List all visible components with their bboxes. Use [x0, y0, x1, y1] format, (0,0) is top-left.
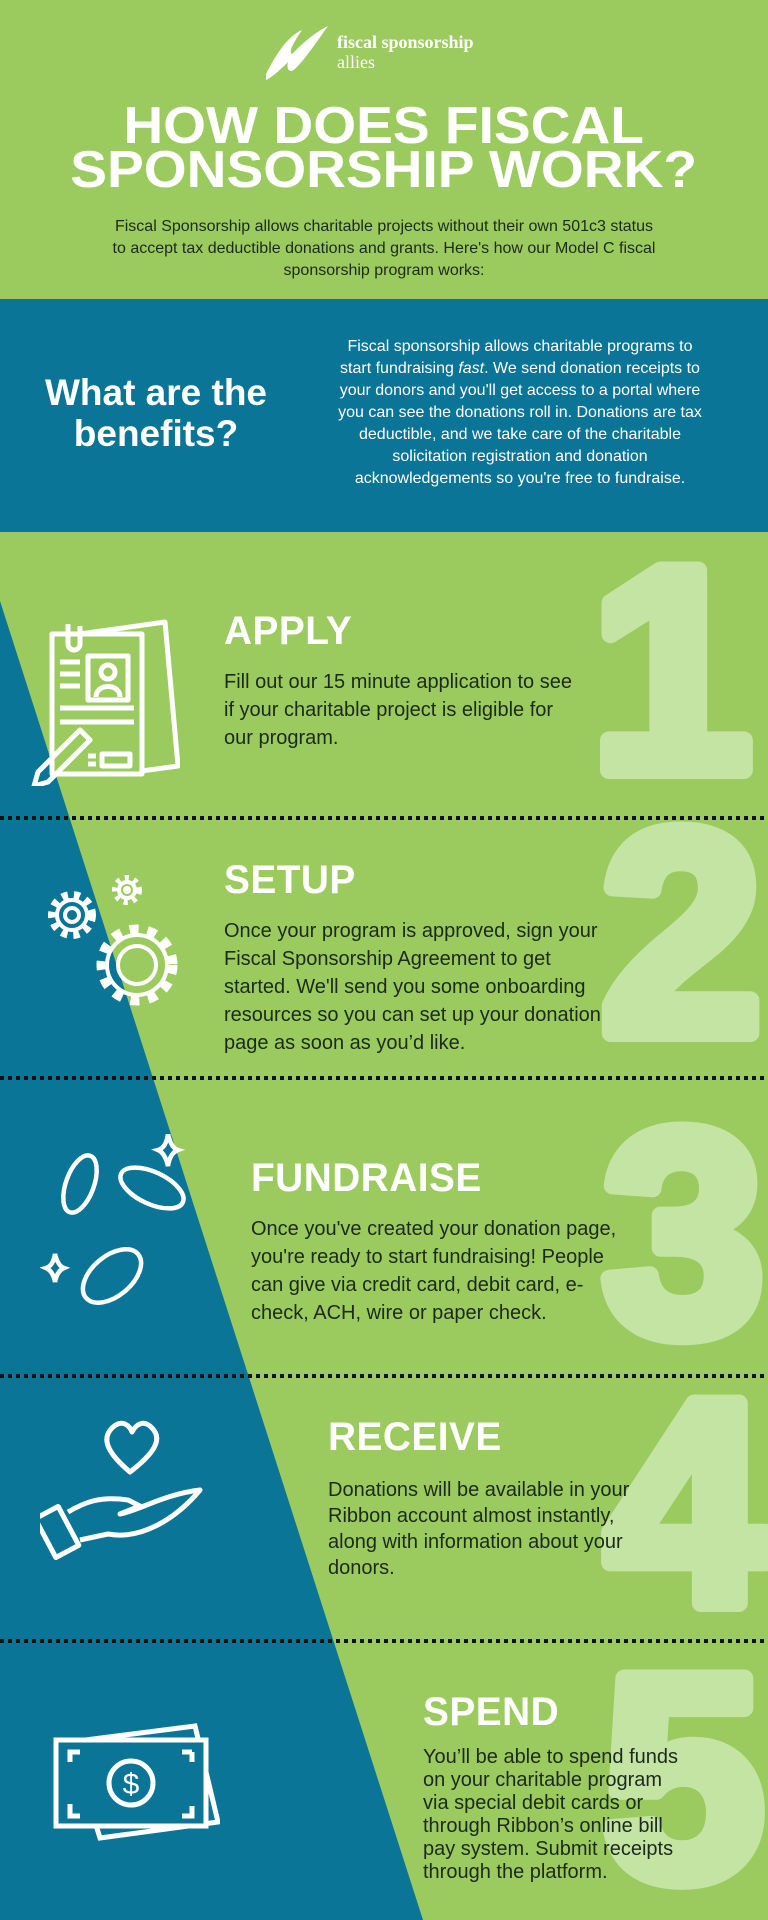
benefits text: deductible, and we take care of the charitable: [359, 426, 681, 443]
icon: application form: [32, 620, 180, 786]
text: fundraise: Once you've created your donation page,: [251, 1218, 616, 1240]
benefits text: solicitation registration and donation: [392, 448, 648, 465]
text: setup: started. We'll send you some onboarding: [224, 976, 585, 998]
text: spend: through the platform.: [423, 1861, 608, 1883]
subtitle: sponsorship program works:: [284, 262, 484, 279]
text: fundraise: you're ready to start fundraising! People: [251, 1246, 604, 1268]
benefits heading: benefits?: [74, 413, 238, 454]
background shapes: 4: [606, 1341, 768, 1665]
subtitle: Fiscal Sponsorship allows charitable projects without their own 501c3 status: [115, 218, 653, 235]
benefits text: [338, 338, 702, 487]
step 4: receive: [328, 1415, 629, 1579]
text: spend: via special debit cards or: [423, 1792, 643, 1814]
step 3: fundraise: [251, 1156, 616, 1324]
text: setup: Fiscal Sponsorship Agreement to get: [224, 948, 551, 970]
text: receive: [328, 1479, 629, 1579]
icon: money: $: [123, 1768, 140, 1801]
text: spend: on your charitable program: [423, 1769, 662, 1791]
text: fundraise: check, ACH, wire or paper check.: [251, 1302, 547, 1324]
title: SPONSORSHIP WORK?: [71, 141, 697, 199]
background shapes: 2: [601, 771, 762, 1095]
heading: setup: SETUP: [224, 858, 356, 902]
benefits text: your donors and you'll get access to a portal where: [340, 382, 700, 399]
subtitle: [112, 218, 655, 279]
benefits heading: What are the: [45, 372, 267, 413]
text: fundraise: can give via credit card, debit card, e-: [251, 1274, 583, 1296]
logo: fiscal sponsorship: [337, 32, 474, 52]
text: spend: through Ribbon’s online bill: [423, 1815, 663, 1837]
icon: hand with heart: [40, 1420, 202, 1560]
benefits text: you can see the donations roll in. Donations are tax: [338, 404, 702, 421]
heading: receive: RECEIVE: [328, 1415, 502, 1459]
text: apply: [224, 671, 572, 749]
text: setup: Once your program is approved, sign your: [224, 920, 598, 942]
text: fundraise: [251, 1218, 616, 1324]
text: setup: page as soon as you’d like.: [224, 1032, 465, 1054]
icon: coins: [40, 1134, 186, 1305]
heading: apply: APPLY: [224, 609, 352, 653]
text: setup: resources so you can set up your donation: [224, 1004, 601, 1026]
text: spend: pay system. Submit receipts: [423, 1838, 673, 1860]
step 5: spend: [423, 1690, 678, 1883]
background shapes: 1: [591, 508, 752, 832]
step 2: setup: [224, 858, 601, 1054]
text: receive: Donations will be available in your: [328, 1479, 629, 1501]
heading: fundraise: FUNDRAISE: [251, 1156, 482, 1200]
logo: allies: [337, 52, 375, 72]
step 1: apply: [224, 609, 572, 749]
text: spend: [423, 1746, 678, 1883]
benefits text: Fiscal sponsorship allows charitable programs to: [347, 338, 693, 355]
text: spend: You’ll be able to spend funds: [423, 1746, 678, 1768]
logo: [266, 26, 474, 80]
text: receive: along with information about your: [328, 1531, 623, 1553]
title: HOW DOES FISCAL: [124, 97, 644, 155]
icon: gears: [48, 875, 178, 1006]
text: apply: Fill out our 15 minute application to see: [224, 671, 572, 693]
heading: spend: SPEND: [423, 1690, 559, 1734]
text: setup: [224, 920, 601, 1054]
text: apply: our program.: [224, 727, 338, 749]
icon: money: [54, 1723, 220, 1841]
text: receive: donors.: [328, 1557, 395, 1579]
benefits text: acknowledgements so you're free to fundraise.: [355, 470, 685, 487]
subtitle: to accept tax deductible donations and grants. Here's how our Model C fiscal: [113, 240, 655, 257]
benefits heading: [45, 372, 267, 454]
title: [71, 97, 697, 199]
text: apply: if your charitable project is eligible for: [224, 699, 553, 721]
benefits text: start fundraising fast. We send donation receipts to: [340, 360, 700, 377]
text: receive: Ribbon account almost instantly,: [328, 1505, 614, 1527]
background shapes: 3: [603, 1071, 764, 1395]
